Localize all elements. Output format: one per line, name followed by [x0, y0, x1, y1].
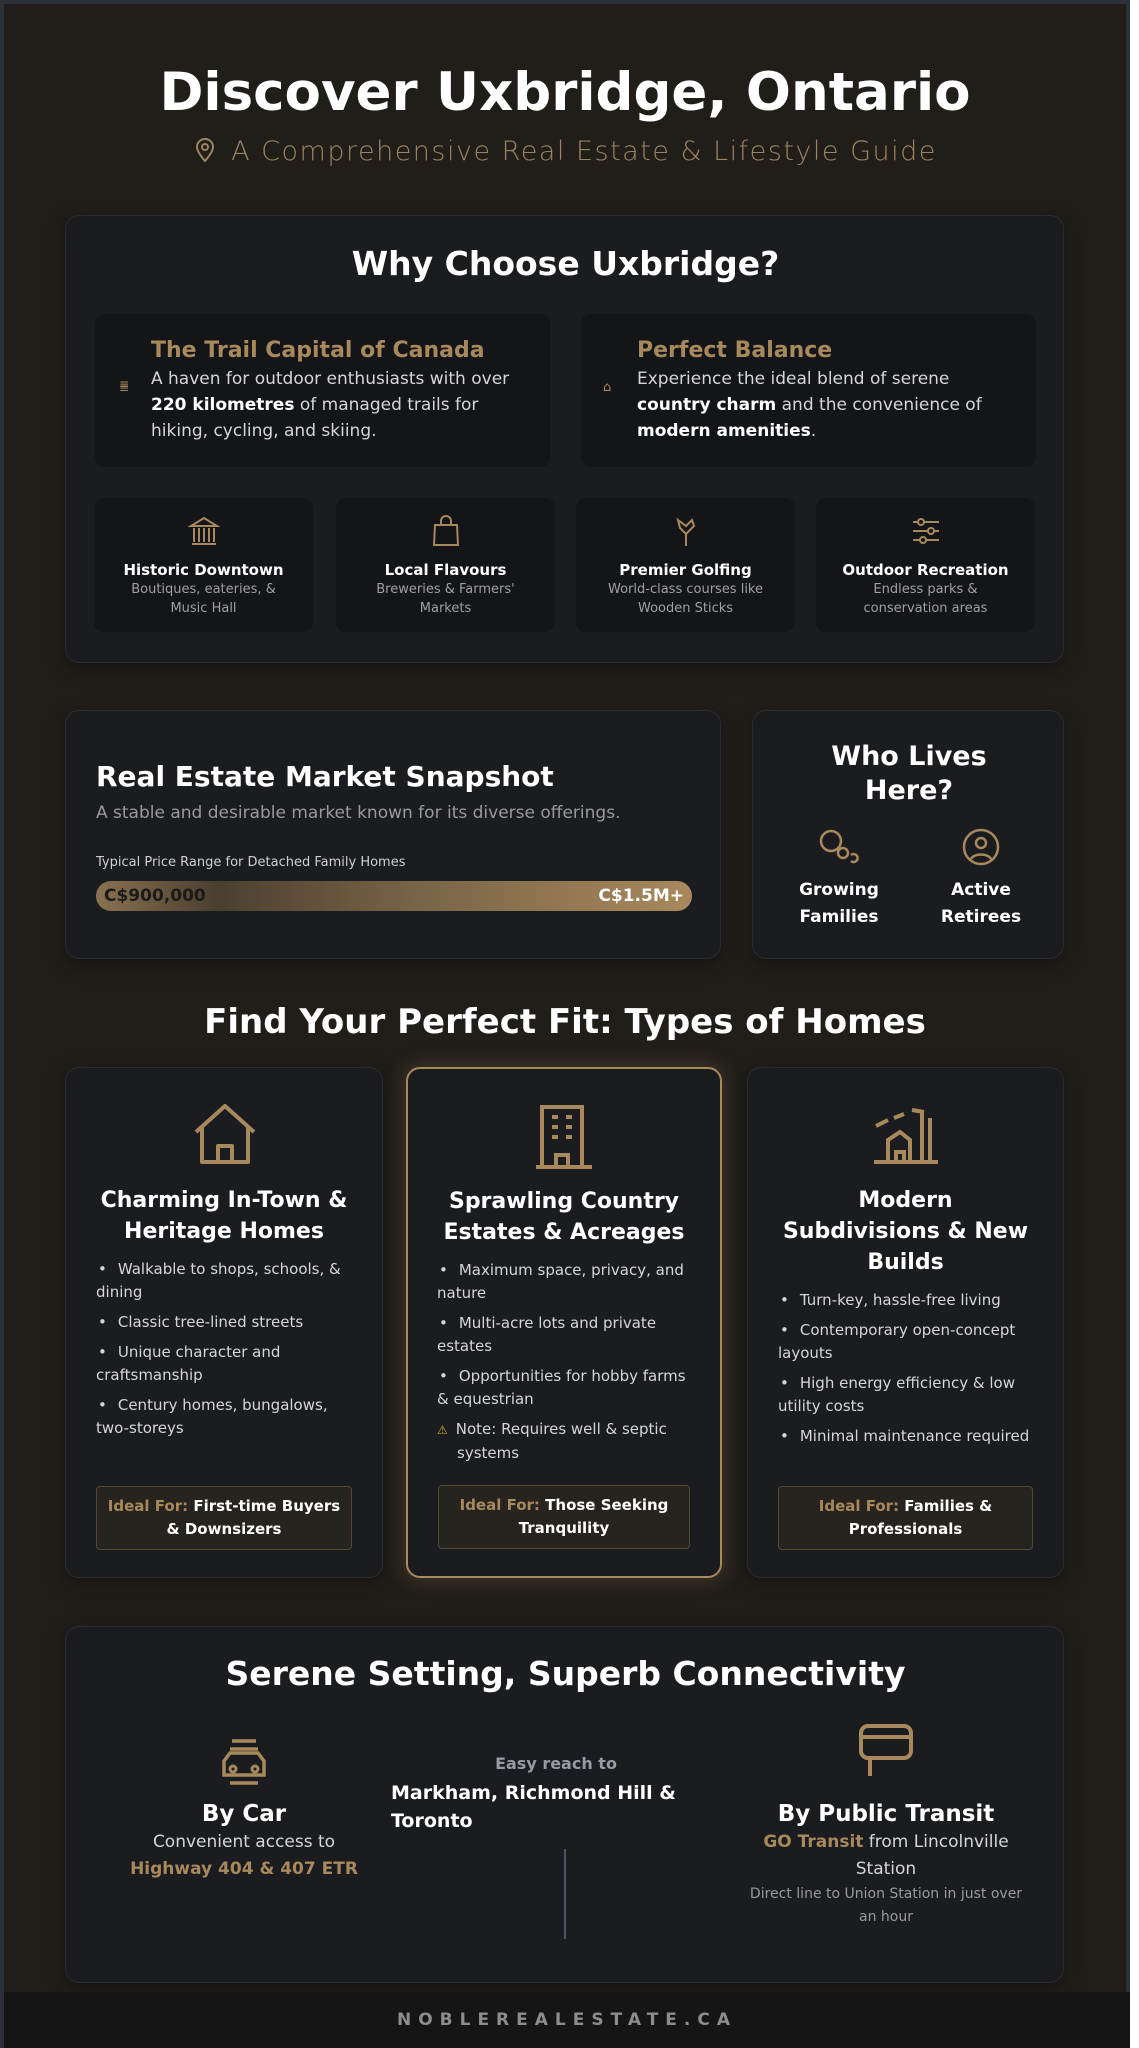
block: public transit	[750, 1724, 1022, 1925]
block: public transit: GO Transit from Lincolnville	[763, 1832, 1009, 1852]
panel: heritage homes	[65, 1067, 383, 1578]
card: historic downtown: Music Hall	[170, 601, 237, 616]
card: outdoor recreation: conservation areas	[864, 601, 987, 616]
card: local flavours: Breweries & Farmers'	[376, 582, 515, 597]
list: heritage: Unique character and craftsmanship	[96, 1343, 280, 1384]
callout: ideal for: Ideal For: First-time Buyers & Downsizers	[108, 1497, 340, 1538]
list: country	[437, 1261, 686, 1462]
heading: heritage: Charming In-Town &	[101, 1188, 347, 1213]
subtitle: A Comprehensive Real Estate & Lifestyle Guide	[231, 136, 937, 167]
divider: vertical	[564, 1849, 566, 1939]
heading: who lives: Who Lives	[831, 741, 987, 772]
bar: price range	[96, 881, 692, 911]
list: country: Opportunities for hobby farms & equestrian	[437, 1367, 686, 1408]
panel: market snapshot	[65, 710, 721, 959]
block: by car	[130, 1739, 358, 1879]
panel: country estates	[406, 1067, 722, 1578]
block: easy reach: Easy reach to	[495, 1754, 617, 1773]
panel: modern subdivisions	[747, 1067, 1064, 1578]
card: historic downtown: Boutiques, eateries, &	[131, 582, 276, 597]
bar: price range: C$1.5M+	[598, 886, 684, 906]
list: country: ⚠ Note: Requires well & septic systems	[437, 1420, 667, 1462]
card: historic downtown: Historic Downtown	[123, 561, 284, 579]
item: active retirees: Retirees	[941, 907, 1021, 927]
block: easy reach: Markham, Richmond Hill &	[391, 1782, 676, 1804]
item: active retirees: Active	[951, 880, 1011, 900]
card: trail capital: The Trail Capital of Canada	[151, 338, 485, 363]
heading: modern	[783, 1188, 1028, 1275]
heading: country	[444, 1189, 684, 1245]
footer: NOBLEREALESTATE.CA	[397, 2010, 737, 2030]
icon: golf	[676, 518, 696, 546]
card: golfing: Wooden Sticks	[638, 601, 733, 616]
heading: who lives: Here?	[865, 775, 953, 806]
block: public transit: Station	[856, 1859, 916, 1879]
list: heritage	[96, 1260, 341, 1437]
heading: heritage	[101, 1188, 347, 1244]
bar: price range: C$900,000	[104, 886, 206, 906]
card: outdoor recreation	[816, 498, 1035, 632]
icon: car	[222, 1739, 266, 1785]
heading: why choose: Why Choose Uxbridge?	[352, 244, 779, 283]
list: heritage: Century homes, bungalows, two-storeys	[96, 1396, 328, 1437]
panel: why choose	[65, 215, 1064, 663]
card: golfing: World-class courses like	[608, 582, 763, 597]
list: heritage: Walkable to shops, schools, & dining	[96, 1260, 341, 1301]
heading: heritage: Heritage Homes	[124, 1219, 324, 1244]
list: modern: High energy efficiency & low utility costs	[778, 1374, 1015, 1415]
title: Discover Uxbridge, Ontario	[159, 62, 971, 123]
callout: ideal for	[778, 1486, 1033, 1550]
footer	[4, 1992, 1130, 2048]
item: active retirees	[941, 828, 1021, 927]
label: price range: Typical Price Range for Detached Family Homes	[96, 855, 406, 870]
icon: modern build	[874, 1108, 938, 1164]
callout: ideal for	[96, 1486, 352, 1550]
card: perfect balance: Perfect Balance	[637, 338, 832, 363]
icon: transit	[859, 1724, 913, 1776]
heading: country: Sprawling Country	[449, 1189, 679, 1214]
list: modern	[778, 1291, 1029, 1445]
block: public transit: Direct line to Union Station in just over	[750, 1886, 1022, 1902]
block: public transit: an hour	[859, 1909, 913, 1925]
icon: house	[194, 1104, 256, 1164]
card: perfect balance	[581, 314, 1036, 467]
block: public transit: By Public Transit	[778, 1801, 994, 1827]
list: modern: Contemporary open-concept layouts	[778, 1321, 1015, 1362]
heading: modern: Builds	[867, 1250, 944, 1275]
list: country: Maximum space, privacy, and nature	[437, 1261, 684, 1302]
heading: who lives	[831, 741, 987, 806]
list: modern: Minimal maintenance required	[800, 1427, 1029, 1445]
icon: balance: ⌂	[603, 380, 611, 395]
item: growing families	[799, 830, 879, 927]
icon: bag	[432, 515, 460, 546]
icon: trail: ≡	[119, 377, 129, 391]
card: trail capital	[95, 314, 550, 467]
item: growing families: Growing	[799, 880, 879, 900]
card: local flavours: Local Flavours	[385, 561, 506, 579]
icon: building	[536, 1105, 592, 1169]
icon: sliders	[913, 518, 939, 544]
panel: who lives here	[752, 710, 1064, 959]
callout: ideal for	[438, 1485, 690, 1549]
card: golfing: Premier Golfing	[619, 561, 752, 579]
heading: market: Real Estate Market Snapshot	[96, 760, 554, 793]
block: by car: Highway 404 & 407 ETR	[130, 1859, 358, 1879]
block: by car: By Car	[202, 1801, 286, 1827]
heading: country: Estates & Acreages	[444, 1220, 684, 1245]
heading: modern: Subdivisions & New	[783, 1219, 1028, 1244]
block: easy reach	[391, 1754, 676, 1832]
card: perfect balance: Experience the ideal blend of serene country charm and the convenience of modern amenities.	[637, 369, 982, 441]
heading: types of homes: Find Your Perfect Fit: Types of Homes	[204, 1002, 926, 1042]
panel: connectivity	[65, 1626, 1064, 1983]
text: market subtitle: A stable and desirable market known for its diverse offerings.	[96, 803, 620, 823]
card: local flavours: Markets	[420, 601, 471, 616]
list: country: Multi-acre lots and private estates	[437, 1314, 656, 1355]
list: heritage: Classic tree-lined streets	[118, 1313, 303, 1331]
card: historic downtown	[94, 498, 313, 632]
card: outdoor recreation: Endless parks &	[873, 582, 978, 597]
card: trail capital: A haven for outdoor enthusiasts with over 220 kilometres of managed trails for hiking, cycling, and skiing.	[151, 369, 509, 441]
icon: building	[188, 517, 220, 545]
icon: trail: ≡	[119, 381, 129, 395]
list: modern: Turn-key, hassle-free living	[800, 1291, 1001, 1309]
card: local flavours	[336, 498, 555, 632]
block: by car: Convenient access to	[153, 1832, 335, 1852]
heading: connectivity: Serene Setting, Superb Connectivity	[226, 1654, 905, 1693]
callout: ideal for: Ideal For: Those Seeking Tranquility	[460, 1496, 668, 1537]
item: growing families: Families	[800, 907, 878, 927]
callout: ideal for: Ideal For: Families & Professionals	[819, 1497, 992, 1538]
card: outdoor recreation: Outdoor Recreation	[842, 561, 1009, 579]
card: golfing	[576, 498, 795, 632]
heading: modern: Modern	[858, 1188, 953, 1213]
block: easy reach: Toronto	[391, 1810, 473, 1832]
